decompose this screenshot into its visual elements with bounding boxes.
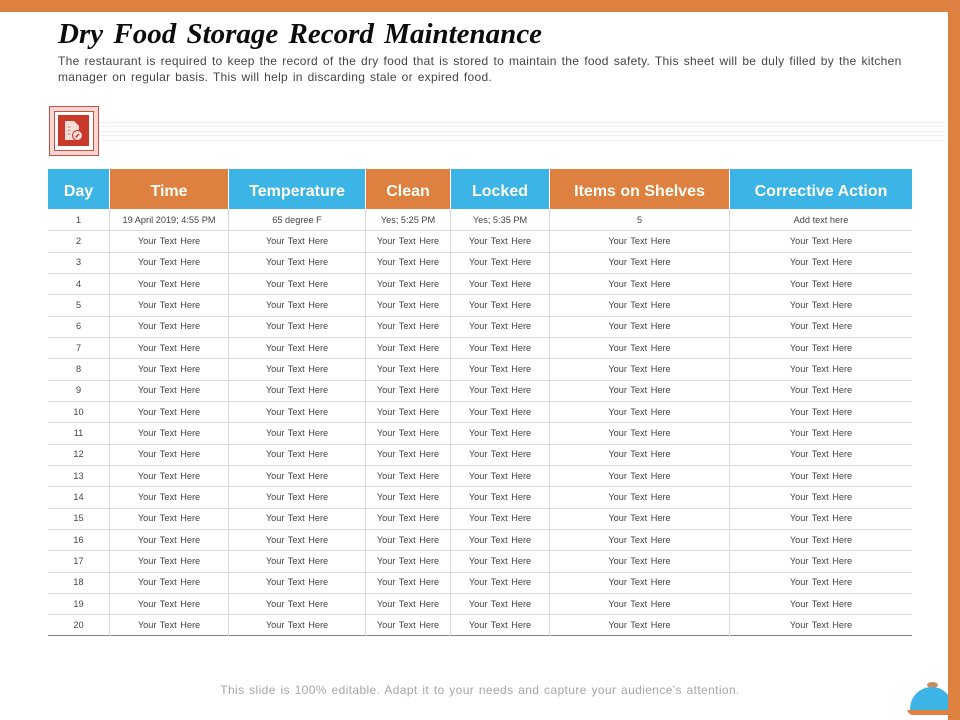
row 4: Your Text Here (469, 279, 531, 289)
row 15: Your Text Here (138, 513, 200, 523)
row 11: Your Text Here (469, 428, 531, 438)
row 17: Your Text Here (608, 556, 671, 566)
row 18: Your Text Here (138, 577, 200, 587)
row 13 (48, 465, 912, 487)
row 6 (48, 316, 912, 338)
row 7: 7 (76, 343, 81, 353)
footer note: This slide is 100% editable. Adapt it to your needs and capture your audience's attention. (220, 683, 740, 697)
row 5 (48, 294, 912, 317)
row 9: Your Text Here (790, 385, 852, 395)
row 7: Your Text Here (377, 343, 439, 353)
row 18: Your Text Here (608, 577, 671, 587)
row 14: Your Text Here (608, 492, 671, 502)
row 12: Your Text Here (469, 449, 531, 459)
row 3: 3 (76, 257, 81, 267)
row 12: Your Text Here (138, 449, 200, 459)
row 8: Your Text Here (138, 364, 200, 374)
row 12: 12 (73, 449, 84, 459)
row 9: Your Text Here (608, 385, 671, 395)
row 11: Your Text Here (138, 428, 200, 438)
row 9: Your Text Here (266, 385, 328, 395)
row 1: Yes; 5:25 PM (381, 215, 435, 225)
header: Clean: Clean (386, 182, 430, 200)
row 11 (48, 422, 912, 445)
row 6: Your Text Here (266, 321, 328, 331)
row 1 (48, 209, 912, 231)
row 3 (48, 252, 912, 274)
row 3: Your Text Here (138, 257, 200, 267)
row 17: Your Text Here (266, 556, 328, 566)
row 14: Your Text Here (469, 492, 531, 502)
row 15: Your Text Here (266, 513, 328, 523)
header: Items on Shelves: Items on Shelves (574, 182, 705, 200)
row 3: Your Text Here (469, 257, 531, 267)
row 7: Your Text Here (469, 343, 531, 353)
icon: document with pencil badge (49, 106, 99, 156)
row 18: Your Text Here (377, 577, 439, 587)
row 13: Your Text Here (266, 471, 328, 481)
row 8: Your Text Here (377, 364, 439, 374)
row 7: Your Text Here (138, 343, 200, 353)
row 18: 18 (73, 577, 84, 587)
row 13: Your Text Here (608, 471, 671, 481)
header: Day: Day (64, 182, 93, 200)
row 10: Your Text Here (790, 407, 852, 417)
row 9: 9 (76, 385, 81, 395)
header: Day (48, 169, 109, 209)
row 1: 65 degree F (272, 215, 322, 225)
header: Items on Shelves (550, 169, 729, 209)
header: Temperature: Temperature (249, 182, 345, 200)
row 15 (48, 508, 912, 530)
row 19: Your Text Here (469, 599, 531, 609)
row 16: Your Text Here (377, 535, 439, 545)
row 8: Your Text Here (469, 364, 531, 374)
row 5: Your Text Here (469, 300, 531, 310)
row 1: 19 April 2019; 4:55 PM (123, 215, 215, 225)
row 20: Your Text Here (469, 620, 531, 630)
row 19: 19 (73, 599, 84, 609)
top orange border (0, 0, 960, 12)
intro text: The restaurant is required to keep the record of the dry food that is stored to maintain the food safety. This sheet will be duly filled by the kitchen (58, 54, 902, 68)
row 19: Your Text Here (377, 599, 439, 609)
row 19: Your Text Here (266, 599, 328, 609)
title: Dry Food Storage Record Maintenance (58, 18, 542, 50)
icon: serving cloche (907, 682, 948, 715)
row 4 (48, 273, 912, 295)
row 14: 14 (73, 492, 84, 502)
row 15: Your Text Here (790, 513, 852, 523)
header: Corrective Action: Corrective Action (755, 182, 887, 200)
row 2 (48, 230, 912, 253)
row 2: Your Text Here (608, 236, 671, 246)
row 6: Your Text Here (608, 321, 671, 331)
row 1: Yes; 5:35 PM (473, 215, 527, 225)
row 10: Your Text Here (469, 407, 531, 417)
row 12: Your Text Here (266, 449, 328, 459)
row 20: 20 (73, 620, 84, 630)
row 17: Your Text Here (790, 556, 852, 566)
row 11: Your Text Here (790, 428, 852, 438)
row 7: Your Text Here (266, 343, 328, 353)
right orange border (948, 0, 960, 720)
row 2: Your Text Here (138, 236, 200, 246)
row 13: Your Text Here (469, 471, 531, 481)
row 17: Your Text Here (377, 556, 439, 566)
row 13: Your Text Here (377, 471, 439, 481)
header: Temperature (229, 169, 365, 209)
row 8: Your Text Here (790, 364, 852, 374)
row 5: Your Text Here (608, 300, 671, 310)
row 6: 6 (76, 321, 81, 331)
row 15: Your Text Here (608, 513, 671, 523)
row 12: Your Text Here (377, 449, 439, 459)
row 8: Your Text Here (266, 364, 328, 374)
row 20 (73, 615, 852, 636)
row 10 (48, 401, 912, 423)
row 11: Your Text Here (608, 428, 671, 438)
row 6: Your Text Here (469, 321, 531, 331)
row 12 (48, 444, 912, 466)
row 14: Your Text Here (790, 492, 852, 502)
row 17: 17 (73, 556, 84, 566)
row 3: Your Text Here (790, 257, 852, 267)
table: dry food storage record (48, 169, 912, 636)
row 20: Your Text Here (790, 620, 852, 630)
row 17: Your Text Here (469, 556, 531, 566)
row 16 (48, 529, 912, 551)
row 19: Your Text Here (790, 599, 852, 609)
row 13: Your Text Here (790, 471, 852, 481)
row 16: Your Text Here (138, 535, 200, 545)
row 16: Your Text Here (469, 535, 531, 545)
intro text: manager on regular basis. This will help in discarding stale or expired food. (58, 70, 492, 84)
row 15: Your Text Here (469, 513, 531, 523)
row 3: Your Text Here (608, 257, 671, 267)
row 1: Add text here (794, 215, 848, 225)
table body rows (48, 209, 912, 636)
row 2: 2 (76, 236, 81, 246)
row 18 (48, 572, 912, 594)
header: Time (110, 169, 228, 209)
row 14: Your Text Here (377, 492, 439, 502)
row 10: 10 (73, 407, 84, 417)
row 20: Your Text Here (266, 620, 328, 630)
row 15: Your Text Here (377, 513, 439, 523)
row 7 (48, 337, 912, 359)
row 4: Your Text Here (377, 279, 439, 289)
row 10: Your Text Here (608, 407, 671, 417)
row 14: Your Text Here (138, 492, 200, 502)
row 4: Your Text Here (608, 279, 671, 289)
row 6: Your Text Here (790, 321, 852, 331)
row 4: Your Text Here (138, 279, 200, 289)
row 2: Your Text Here (377, 236, 439, 246)
row 19 (48, 593, 912, 615)
intro text (58, 54, 902, 84)
row 5: Your Text Here (138, 300, 200, 310)
row 7: Your Text Here (608, 343, 671, 353)
row 12: Your Text Here (608, 449, 671, 459)
row 2: Your Text Here (266, 236, 328, 246)
row 5: Your Text Here (790, 300, 852, 310)
row 16: Your Text Here (790, 535, 852, 545)
header: Time: Time (150, 182, 188, 200)
row 5: 5 (76, 300, 81, 310)
row 7: Your Text Here (790, 343, 852, 353)
row 11: Your Text Here (266, 428, 328, 438)
row 18: Your Text Here (790, 577, 852, 587)
row 19: Your Text Here (608, 599, 671, 609)
row 20: Your Text Here (377, 620, 439, 630)
row 20: Your Text Here (138, 620, 200, 630)
row 12: Your Text Here (790, 449, 852, 459)
row 4: 4 (76, 279, 81, 289)
row 1: 1 (76, 215, 81, 225)
row 1: 5 (637, 215, 642, 225)
row 14 (48, 486, 912, 509)
row 9: Your Text Here (138, 385, 200, 395)
header: Locked (451, 169, 549, 209)
row 16: Your Text Here (266, 535, 328, 545)
row 11: Your Text Here (377, 428, 439, 438)
row 3: Your Text Here (377, 257, 439, 267)
row 2: Your Text Here (469, 236, 531, 246)
row 2: Your Text Here (790, 236, 852, 246)
row 3: Your Text Here (266, 257, 328, 267)
row 18: Your Text Here (469, 577, 531, 587)
row 6: Your Text Here (377, 321, 439, 331)
row 19: Your Text Here (138, 599, 200, 609)
row 11: 11 (74, 428, 83, 438)
row 10: Your Text Here (377, 407, 439, 417)
row 9 (48, 380, 912, 402)
row 17 (48, 550, 912, 573)
row 8: 8 (76, 364, 81, 374)
row 5: Your Text Here (266, 300, 328, 310)
row 13: Your Text Here (138, 471, 200, 481)
header: Corrective Action (730, 169, 912, 209)
row 17: Your Text Here (138, 556, 200, 566)
header: Clean (366, 169, 450, 209)
row 13: 13 (73, 471, 84, 481)
row 9: Your Text Here (377, 385, 439, 395)
row 8: Your Text Here (608, 364, 671, 374)
header: Locked: Locked (472, 182, 528, 200)
row 4: Your Text Here (790, 279, 852, 289)
row 16: 16 (73, 535, 84, 545)
row 16: Your Text Here (608, 535, 671, 545)
row 8 (48, 358, 912, 381)
row 14: Your Text Here (266, 492, 328, 502)
row 5: Your Text Here (377, 300, 439, 310)
row 9: Your Text Here (469, 385, 531, 395)
row 6: Your Text Here (138, 321, 200, 331)
row 18: Your Text Here (266, 577, 328, 587)
row 15: 15 (73, 513, 84, 523)
row 4: Your Text Here (266, 279, 328, 289)
row 20: Your Text Here (608, 620, 671, 630)
row 10: Your Text Here (138, 407, 200, 417)
row 10: Your Text Here (266, 407, 328, 417)
